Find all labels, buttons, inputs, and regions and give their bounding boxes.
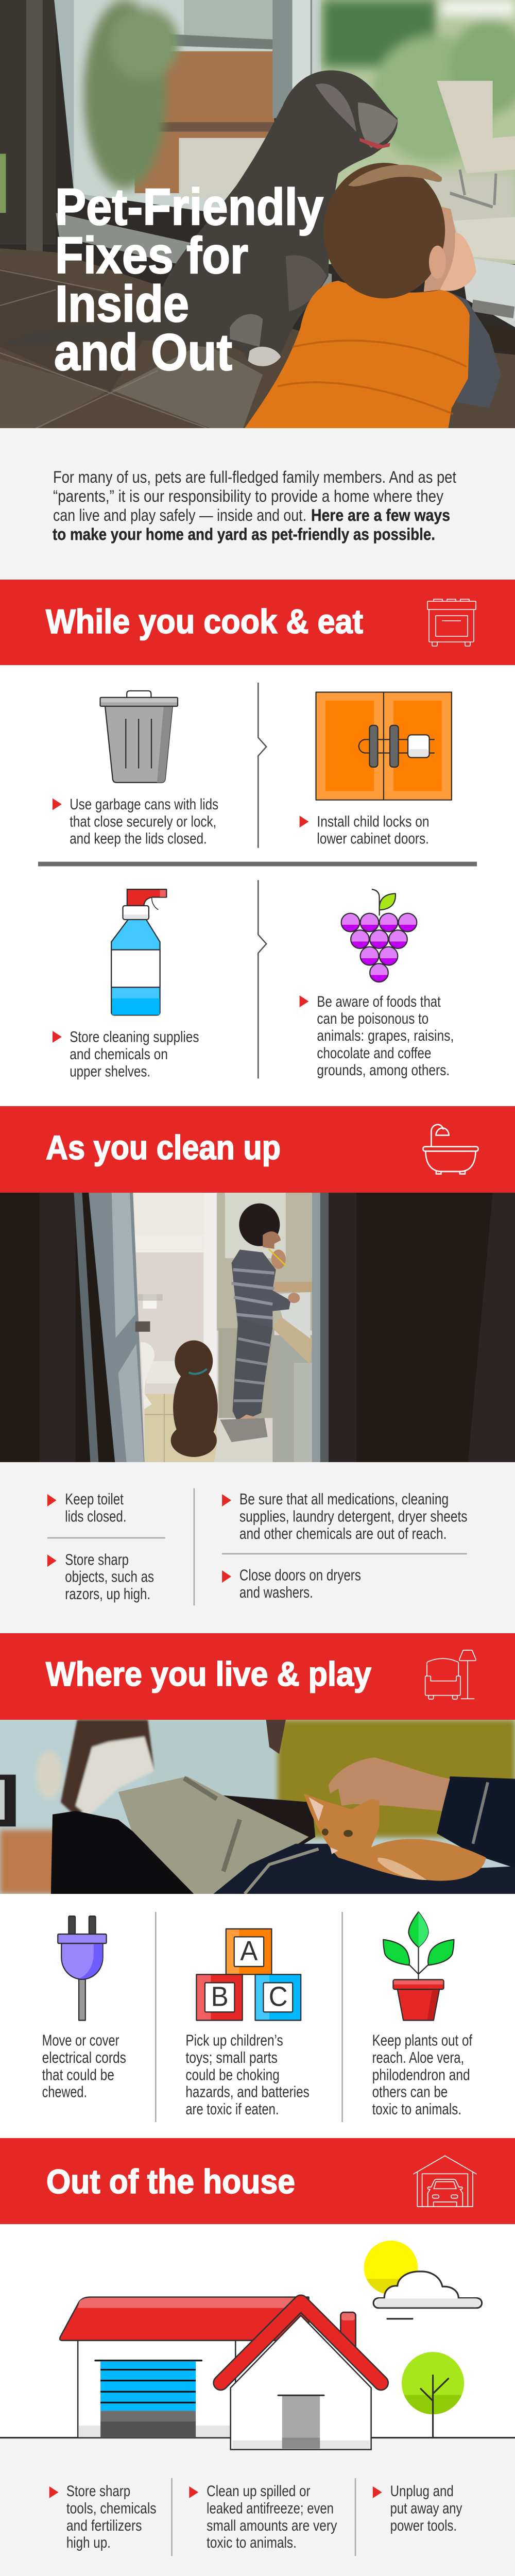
tip: garbage cans xyxy=(53,796,218,847)
intro paragraph: “parents,” it is our responsibility to provide a home where they xyxy=(53,487,443,505)
icon: garage with car xyxy=(413,2156,477,2207)
tip: plants xyxy=(372,2032,473,2118)
boy xyxy=(239,1204,280,1246)
tip: electrical cords: that could be xyxy=(42,2066,114,2083)
title: Pet-Friendly xyxy=(55,178,323,236)
tip: sharp tools: Store sharp xyxy=(66,2483,130,2500)
icon: cabinet with child lock xyxy=(316,692,452,800)
icon: alphabet blocks xyxy=(196,1929,301,2020)
tree xyxy=(402,2352,464,2438)
door xyxy=(89,1193,145,1462)
icon: armchair and lamp xyxy=(424,1650,476,1700)
cloud xyxy=(373,2272,482,2319)
heading: as you clean up: As you clean up xyxy=(46,1128,281,1166)
tip: sharp objects: Store sharp xyxy=(65,1551,129,1568)
tip: poisonous foods: chocolate and coffee xyxy=(317,1045,431,1062)
tip: sharp objects: objects, such as xyxy=(65,1568,154,1586)
banner: out of the house xyxy=(0,2138,515,2224)
tip: plants: toxic to animals. xyxy=(372,2101,461,2118)
tip: antifreeze xyxy=(189,2483,337,2551)
heading: while you cook and eat: While you cook & eat xyxy=(46,602,363,640)
garage xyxy=(60,2297,308,2438)
tip: children's toys: are toxic if eaten. xyxy=(185,2101,279,2118)
intro paragraph: For many of us, pets are full-fledged family members. And as pet xyxy=(53,468,456,486)
tip: dryers and washers xyxy=(222,1567,361,1601)
banner: as you clean up xyxy=(0,1106,515,1193)
hero photo: boy and dog at the window xyxy=(0,0,515,428)
tip: plants: others can be xyxy=(372,2083,448,2101)
title: Inside xyxy=(55,275,189,333)
tip: medications: and other chemicals are out of reach. xyxy=(239,1525,447,1543)
banner: while you cook and eat xyxy=(0,580,515,665)
icon: alphabet blocks: A xyxy=(240,1936,258,1967)
stool xyxy=(214,1418,272,1462)
chimney xyxy=(340,2312,356,2352)
panel: out of the house illustration and tips xyxy=(0,2241,515,2556)
title: and Out xyxy=(54,324,232,381)
icon: alphabet blocks: B xyxy=(211,1981,229,2012)
tip: children's toys: toys; small parts xyxy=(185,2049,278,2066)
icon: bathtub xyxy=(422,1124,479,1175)
photo: boy brushing teeth with dog xyxy=(0,1193,515,1462)
intro paragraph xyxy=(53,468,456,544)
tip: electrical cords: electrical cords xyxy=(42,2049,126,2066)
toilet xyxy=(141,1342,154,1410)
tip: power tools: Unplug and xyxy=(390,2483,454,2500)
tip: toilet lids: lids closed. xyxy=(65,1508,127,1526)
tip: power tools: power tools. xyxy=(390,2517,457,2534)
tip: cleaning supplies xyxy=(53,1029,199,1080)
tip: children's toys xyxy=(185,2032,310,2118)
tip: cleaning supplies: upper shelves. xyxy=(70,1063,150,1080)
tip: plants: reach. Aloe vera, xyxy=(372,2049,464,2066)
tip: children's toys: Pick up children’s xyxy=(185,2032,283,2049)
tip: power tools xyxy=(373,2483,462,2534)
intro paragraph: to make your home and yard as pet-friendly as possible. xyxy=(53,525,435,544)
tip: electrical cords xyxy=(42,2032,126,2101)
tip: garbage cans: Use garbage cans with lids xyxy=(70,796,218,813)
illustration: house, garage, sun, cloud and tree xyxy=(0,2241,515,2450)
boy xyxy=(245,163,501,428)
icon: garbage can xyxy=(100,691,178,783)
tip: antifreeze: Clean up spilled or xyxy=(207,2483,311,2500)
tip: garbage cans: and keep the lids closed. xyxy=(70,830,207,847)
title: Fixes for xyxy=(55,227,248,284)
tip: plants: philodendron and xyxy=(372,2066,470,2083)
heading: where you live and play: Where you live & play xyxy=(46,1655,371,1693)
tip: antifreeze: toxic to animals. xyxy=(207,2534,297,2551)
tip: poisonous foods: grounds, among others. xyxy=(317,1062,450,1079)
dog xyxy=(171,1341,218,1457)
hero panel xyxy=(0,0,515,428)
icon: spray bottle xyxy=(111,889,166,1015)
photo: person petting kitten xyxy=(0,1720,515,1894)
tip: medications: supplies, laundry detergent, dryer sheets xyxy=(239,1508,468,1526)
house xyxy=(221,2302,381,2450)
tip: medications: Be sure that all medications, cleaning xyxy=(239,1490,449,1508)
tip: antifreeze: small amounts are very xyxy=(207,2517,337,2534)
icon: alphabet blocks: C xyxy=(269,1981,288,2012)
tip: poisonous foods xyxy=(300,993,454,1079)
tip: child locks: Install child locks on xyxy=(317,813,430,830)
icon: stove xyxy=(427,599,476,646)
intro paragraph: can live and play safely — inside and out. xyxy=(53,506,306,524)
tip: poisonous foods: animals: grapes, raisins, xyxy=(317,1027,454,1044)
tip: cleaning supplies: Store cleaning supplies xyxy=(70,1029,199,1046)
tip: toilet lids xyxy=(47,1490,127,1526)
tip: sharp tools: and fertilizers xyxy=(66,2517,142,2534)
icon: plug xyxy=(58,1916,107,2020)
tip: poisonous foods: can be poisonous to xyxy=(317,1010,428,1027)
sun xyxy=(364,2241,418,2295)
panel: while you cook tips xyxy=(38,683,477,1080)
tip: electrical cords: Move or cover xyxy=(42,2032,119,2049)
kitten xyxy=(304,1794,486,1881)
tip: sharp objects: razors, up high. xyxy=(65,1586,150,1603)
tip: child locks xyxy=(300,813,430,847)
tip: power tools: put away any xyxy=(390,2500,462,2517)
tip: children's toys: could be choking xyxy=(185,2066,280,2083)
tip: dryers and washers: and washers. xyxy=(239,1584,313,1601)
tip: sharp tools: tools, chemicals xyxy=(66,2500,157,2517)
tip: plants: Keep plants out of xyxy=(372,2032,473,2049)
banner: where you live and play xyxy=(0,1633,515,1720)
tip: sharp tools: high up. xyxy=(66,2534,111,2551)
title xyxy=(54,178,323,381)
tip: electrical cords: chewed. xyxy=(42,2083,87,2101)
tip: garbage cans: that close securely or lock, xyxy=(70,813,216,830)
tip: dryers and washers: Close doors on dryers xyxy=(239,1567,361,1584)
tip: poisonous foods: Be aware of foods that xyxy=(317,993,441,1010)
tip: antifreeze: leaked antifreeze; even xyxy=(207,2500,334,2517)
tip: sharp tools xyxy=(49,2483,157,2551)
icon: potted plant xyxy=(383,1912,454,2020)
panel: live and play tips xyxy=(42,1911,473,2122)
tip: cleaning supplies: and chemicals on xyxy=(70,1046,168,1063)
tip: child locks: lower cabinet doors. xyxy=(317,830,429,847)
heading: out of the house: Out of the house xyxy=(46,2162,295,2200)
intro paragraph: Here are a few ways xyxy=(311,506,450,524)
tip: sharp objects xyxy=(47,1551,154,1603)
icon: grapes xyxy=(341,889,417,982)
panel: clean up tips xyxy=(47,1488,468,1605)
tip: children's toys: hazards, and batteries xyxy=(185,2083,310,2101)
tip: toilet lids: Keep toilet xyxy=(65,1490,124,1508)
dog xyxy=(7,71,398,366)
tip: medications xyxy=(222,1490,468,1543)
